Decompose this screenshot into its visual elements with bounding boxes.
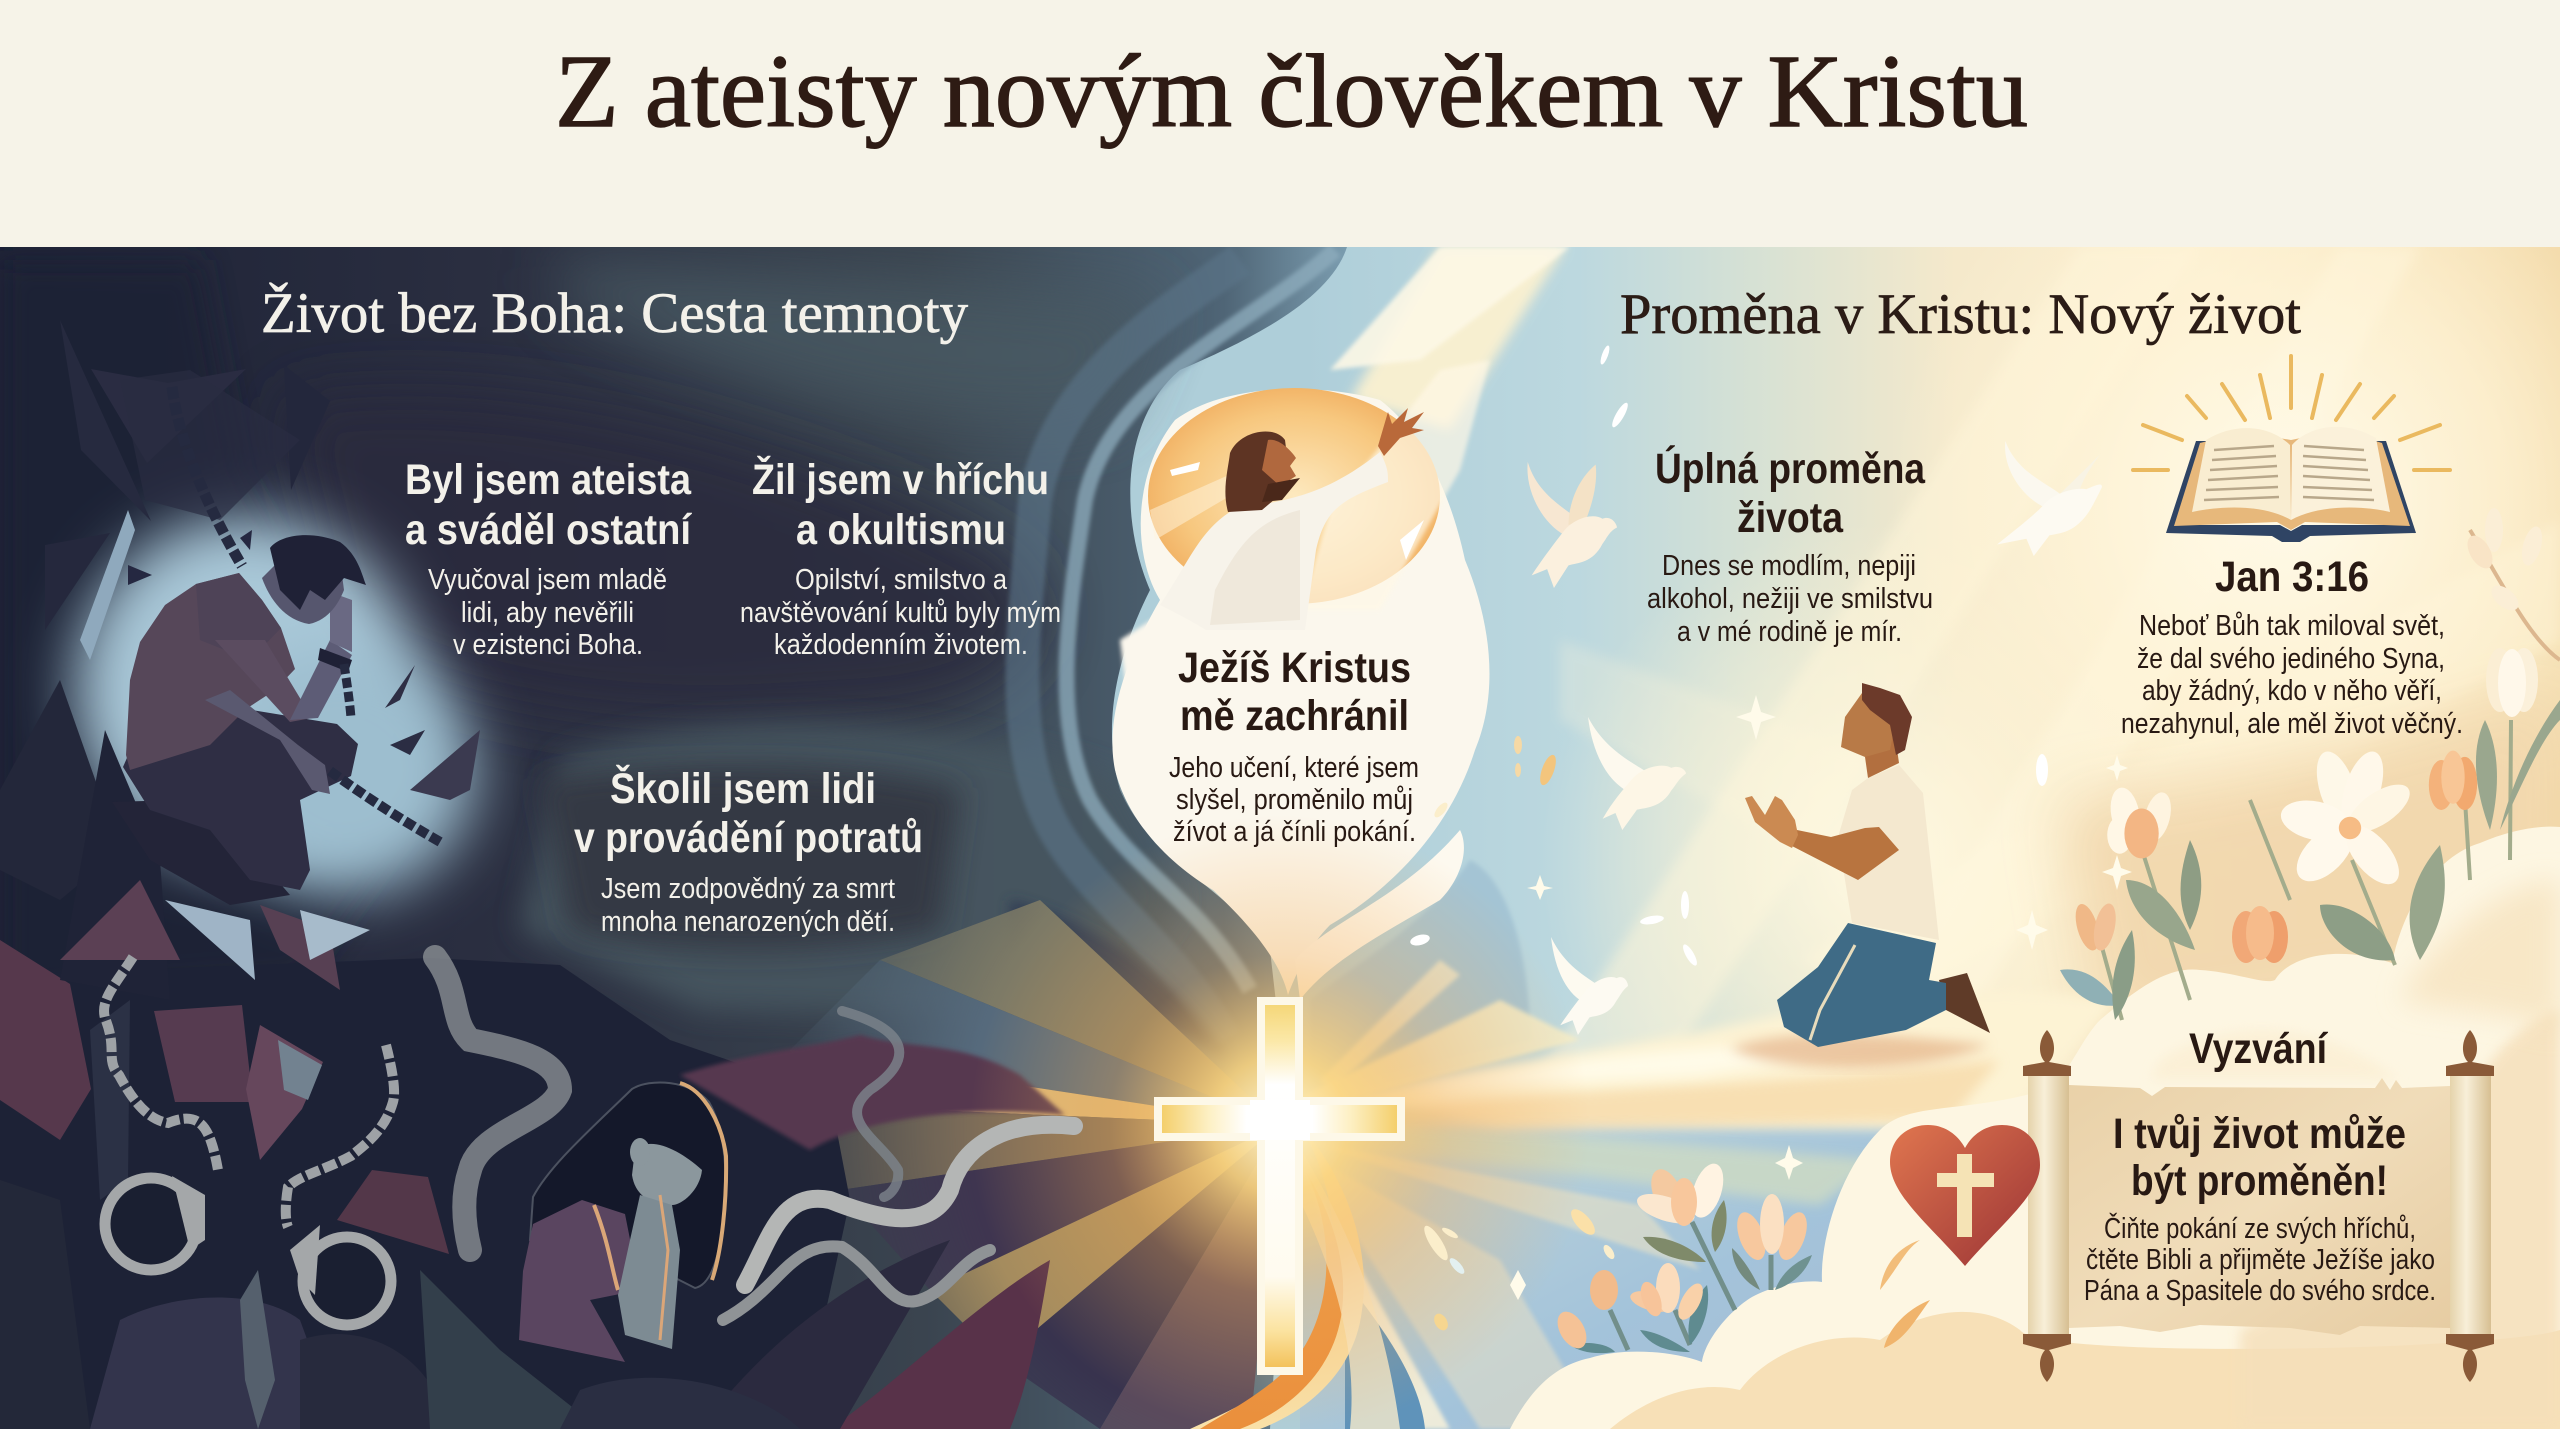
text block: Jesus saved me <box>1169 644 1419 848</box>
scroll text: I tvůj život může <box>2113 1110 2406 1158</box>
wrist chains <box>344 664 351 718</box>
smoke wisps <box>435 957 1074 1320</box>
text block: sin and occultism <box>740 455 1061 661</box>
rays from the cross, left <box>790 900 1280 1429</box>
text block: complete change: Úplná proměna <box>1655 444 1926 493</box>
text block: ateist: a sváděl ostatní <box>405 506 693 554</box>
roller right <box>2446 1030 2494 1382</box>
petals and sparkles <box>1409 345 2132 1348</box>
roller left <box>2023 1030 2071 1382</box>
text block: John 3:16: Neboť Bůh tak miloval svět, <box>2139 610 2445 642</box>
scroll text: Čiňte pokání ze svých hříchů, <box>2104 1211 2416 1245</box>
dove 3 <box>1588 717 1686 830</box>
bottom bud C <box>1590 1270 1618 1310</box>
dove 1 <box>1527 462 1617 588</box>
text block: abortions <box>574 764 923 938</box>
scroll text: být proměněn! <box>2131 1157 2388 1205</box>
bottom flower A <box>1634 1160 1729 1229</box>
text block: abortions: Jsem zodpovědný za smrt <box>601 873 895 905</box>
text block: Jesus saved me: Jeho učení, které jsem <box>1169 752 1419 784</box>
bottom bud E <box>1552 1307 1592 1353</box>
icon: glowing cross <box>1154 997 1405 1375</box>
swoop around the cross base <box>1190 1192 1400 1429</box>
text block: John 3:16: nezahynul, ale měl život věčný. <box>2121 708 2463 740</box>
bottom flower B <box>1731 1194 1813 1264</box>
text block: Jesus saved me: Ježíš Kristus <box>1178 644 1411 692</box>
text block: abortions: Školil jsem lidi <box>610 764 876 813</box>
torso <box>126 573 295 770</box>
flower: orange <box>2429 751 2477 810</box>
text block: sin and occultism: navštěvování kultů byly mým <box>740 597 1061 629</box>
parchment <box>2069 1078 2450 1335</box>
rocks and mountains, lower left <box>0 940 1065 1429</box>
text block: abortions: mnoha nenarozených dětí. <box>601 906 895 938</box>
icon: heart with cross <box>1890 1125 2040 1266</box>
scroll <box>2023 1025 2494 1382</box>
text block: sin and occultism: a okultismu <box>796 506 1006 554</box>
flower: bud <box>2071 901 2120 953</box>
heading: right panel: Proměna v Kristu: Nový život <box>1620 283 2301 346</box>
icon: flowers right <box>2060 508 2560 1020</box>
text block: John 3:16: že dal svého jediného Syna, <box>2137 643 2445 675</box>
icon: crying woman <box>519 1082 726 1362</box>
icon: doves <box>1527 441 2102 1035</box>
right side: light beams <box>1350 247 2560 1220</box>
glow behind cross <box>992 836 1564 1410</box>
icon: flowers bottom <box>1552 1160 1813 1353</box>
bottom flower D <box>1628 1263 1708 1324</box>
text block: John 3:16 <box>2121 553 2463 740</box>
lower right blue water with rays <box>1311 1123 1888 1429</box>
flower: orange low <box>2232 906 2288 963</box>
dove 2 <box>1997 441 2102 556</box>
text block: complete change: alkohol, nežiji ve smilstvu <box>1647 583 1933 615</box>
text block: complete change: života <box>1737 494 1844 542</box>
white bubble with Jesus <box>1112 247 1570 995</box>
flower: large white <box>2277 746 2417 893</box>
icon: broken handcuffs and chains <box>104 957 394 1429</box>
icon: open Bible with rays <box>2133 356 2450 542</box>
arm to head <box>215 640 312 722</box>
branch <box>2470 530 2560 660</box>
face and hair <box>262 550 344 624</box>
lower arm <box>205 690 330 794</box>
icon: man in chains with glow <box>0 320 480 1000</box>
left side: dark field <box>0 247 1347 1429</box>
figure: Jesus <box>1184 408 1424 625</box>
rear leg <box>112 800 290 905</box>
text block: sin and occultism: každodenním životem. <box>774 629 1028 661</box>
sun disc <box>1148 388 1440 604</box>
chain to collar <box>172 387 242 566</box>
dove 4 <box>1551 937 1628 1035</box>
text block: ateist: v ezistenci Boha. <box>453 629 643 661</box>
text block: complete change: a v mé rodině je mír. <box>1677 616 1902 648</box>
text block: John 3:16: Jan 3:16 <box>2215 553 2369 601</box>
text block: Jesus saved me: mě zachránil <box>1180 692 1409 740</box>
front leg <box>123 709 358 890</box>
text block: complete change <box>1647 444 1933 648</box>
text block: abortions: v provádění potratů <box>574 814 923 862</box>
clouds, lower right <box>1510 827 2560 1429</box>
text block: sin and occultism: Opilství, smilstvo a <box>795 564 1008 596</box>
text block: ateist: Vyučoval jsem mladě <box>428 564 667 596</box>
scroll heading: Vyzvání <box>2189 1025 2329 1073</box>
text block: sin and occultism: Žil jsem v hříchu <box>752 455 1049 504</box>
icon: kneeling man praying <box>1730 683 1990 1068</box>
title: Z ateisty novým člověkem v Kristu <box>555 34 2028 149</box>
text block: ateist: lidi, aby nevěřili <box>461 597 634 629</box>
text block: complete change: Dnes se modlím, nepiji <box>1662 550 1916 582</box>
text block: Jesus saved me: slyšel, proměnilo můj <box>1176 784 1413 816</box>
title band <box>0 0 2560 247</box>
text block: ateist <box>405 456 693 661</box>
heading: left panel: Život bez Boha: Cesta temnoty <box>261 282 968 345</box>
scroll text: Pána a Spasitele do svého srdce. <box>2084 1275 2436 1307</box>
text block: ateist: Byl jsem ateista <box>405 456 692 504</box>
text block: John 3:16: aby žádný, kdo v něho věří, <box>2142 675 2442 707</box>
flower: white tulip <box>2486 648 2538 717</box>
ground beam under kneeling man <box>1330 992 2120 1130</box>
flower: white and peach <box>2107 785 2176 858</box>
text block: Jesus saved me: žívot a já čínli pokání. <box>1173 816 1416 848</box>
scroll text <box>2084 1110 2436 1307</box>
right upper wedge beside cross <box>1295 830 1580 1110</box>
scroll text: čtěte Bibli a přijměte Ježíše jako <box>2086 1244 2435 1276</box>
